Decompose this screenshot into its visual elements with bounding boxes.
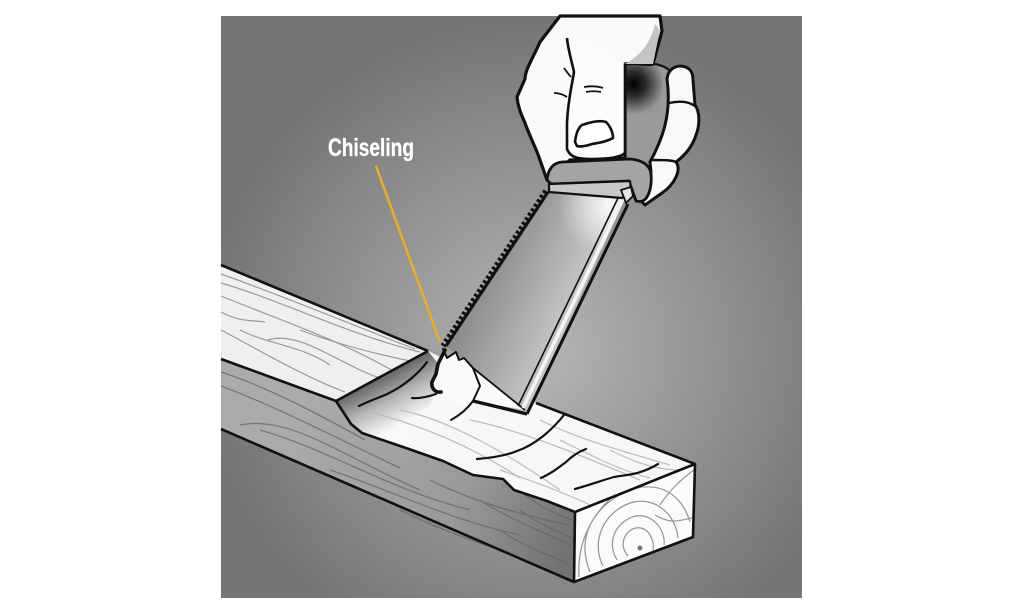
board outlines	[221, 265, 695, 582]
teeth biting into the chip	[432, 350, 445, 392]
board top face, left of the notch	[221, 265, 428, 401]
blade highlight near the handle	[545, 191, 625, 275]
handle outline	[625, 63, 669, 148]
board: wooden beam	[221, 265, 695, 582]
board side face	[221, 359, 575, 582]
fingers	[640, 66, 699, 205]
grip dark spot	[625, 63, 664, 115]
hand gripping handle	[517, 16, 699, 205]
knuckle creases	[554, 68, 603, 97]
thumb	[567, 38, 625, 159]
chisel tang	[549, 181, 631, 198]
chisel blade	[447, 191, 625, 413]
blade right edge	[527, 204, 628, 414]
callout label: Chiseling	[328, 134, 414, 162]
thumbnail	[575, 121, 613, 146]
serrated teeth	[443, 191, 548, 346]
blade edge highlight	[523, 199, 623, 408]
chisel	[443, 191, 628, 414]
palm outline	[517, 16, 662, 180]
panel: grey background	[221, 16, 802, 598]
handle grip	[625, 63, 670, 162]
chisel bevel	[473, 368, 525, 410]
board top face, chiselled ramp and flat	[336, 351, 695, 512]
callout: chiseling leader line	[376, 166, 440, 342]
finger separation	[652, 102, 695, 162]
hand shading	[625, 24, 660, 64]
shaving: curled wood chip	[432, 349, 480, 420]
board surface ink marks	[359, 362, 658, 489]
board end grain face	[574, 464, 695, 582]
collar ferrule	[621, 187, 633, 203]
handle collar	[547, 159, 651, 202]
